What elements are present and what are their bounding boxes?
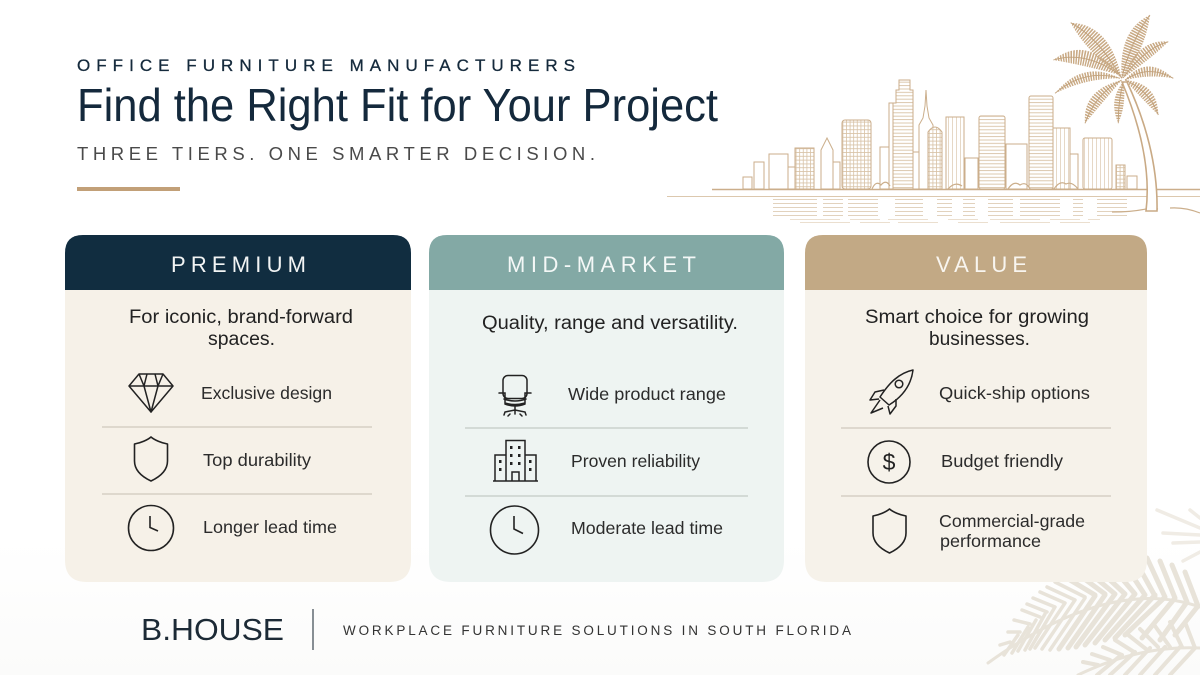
feature: commercial-grade performance (939, 511, 1085, 551)
icon: rocket (870, 370, 913, 414)
icon: clock (490, 506, 538, 554)
feature: commercial-grade performance: performance (940, 531, 1041, 551)
decorative palm fronds bottom right (988, 510, 1200, 675)
description: premium (129, 307, 353, 350)
description: value: Smart choice for growing (865, 307, 1089, 328)
illustration: Miami skyline (667, 80, 1200, 222)
icon: dollar coin (868, 441, 910, 483)
icon: diamond (129, 374, 173, 412)
panel: premium (65, 235, 411, 582)
panel: mid-market (429, 235, 784, 582)
description: value (865, 307, 1089, 350)
panel: value (805, 235, 1147, 582)
description: premium: spaces. (208, 329, 275, 350)
feature: top durability: Top durability (203, 450, 311, 470)
feature: exclusive design: Exclusive design (201, 383, 332, 403)
trunk (1122, 82, 1157, 211)
title: Find the Right Fit for Your Project (77, 79, 718, 131)
icon: dollar coin: $ (883, 449, 896, 475)
description: value: businesses. (929, 329, 1030, 350)
feature: wide product range: Wide product range (568, 384, 726, 404)
feature: proven reliability: Proven reliability (571, 451, 700, 471)
heading: value: VALUE (936, 252, 1027, 277)
shrubs (872, 182, 1078, 189)
subtitle: THREE TIERS. ONE SMARTER DECISION. (77, 143, 595, 164)
buildings (743, 80, 1137, 189)
icon: office chair (499, 376, 531, 416)
feature: commercial-grade performance: Commercial-grade (939, 511, 1085, 531)
description: premium: For iconic, brand-forward (129, 307, 353, 328)
footer: tagline: WORKPLACE FURNITURE SOLUTIONS IN SOUTH FLORIDA (343, 623, 851, 638)
waterfront lines (667, 190, 1200, 222)
footer: brand: B.HOUSE (141, 612, 284, 647)
feature: longer lead time: Longer lead time (203, 517, 337, 537)
accent rule (77, 187, 180, 191)
illustration: palm tree (1053, 15, 1173, 211)
icon: shield (873, 509, 906, 553)
heading: premium: PREMIUM (171, 252, 306, 277)
icon: shield (134, 437, 168, 481)
feature: quick-ship options: Quick-ship options (939, 383, 1090, 403)
heading: mid-market: MID-MARKET (507, 252, 696, 277)
icon: building (493, 440, 538, 481)
description: mid-market: Quality, range and versatility. (482, 313, 738, 334)
eyebrow: OFFICE FURNITURE MANUFACTURERS (77, 56, 575, 75)
feature: budget friendly: Budget friendly (941, 451, 1063, 471)
icon: clock (128, 506, 174, 550)
feature: moderate lead time: Moderate lead time (571, 518, 723, 538)
